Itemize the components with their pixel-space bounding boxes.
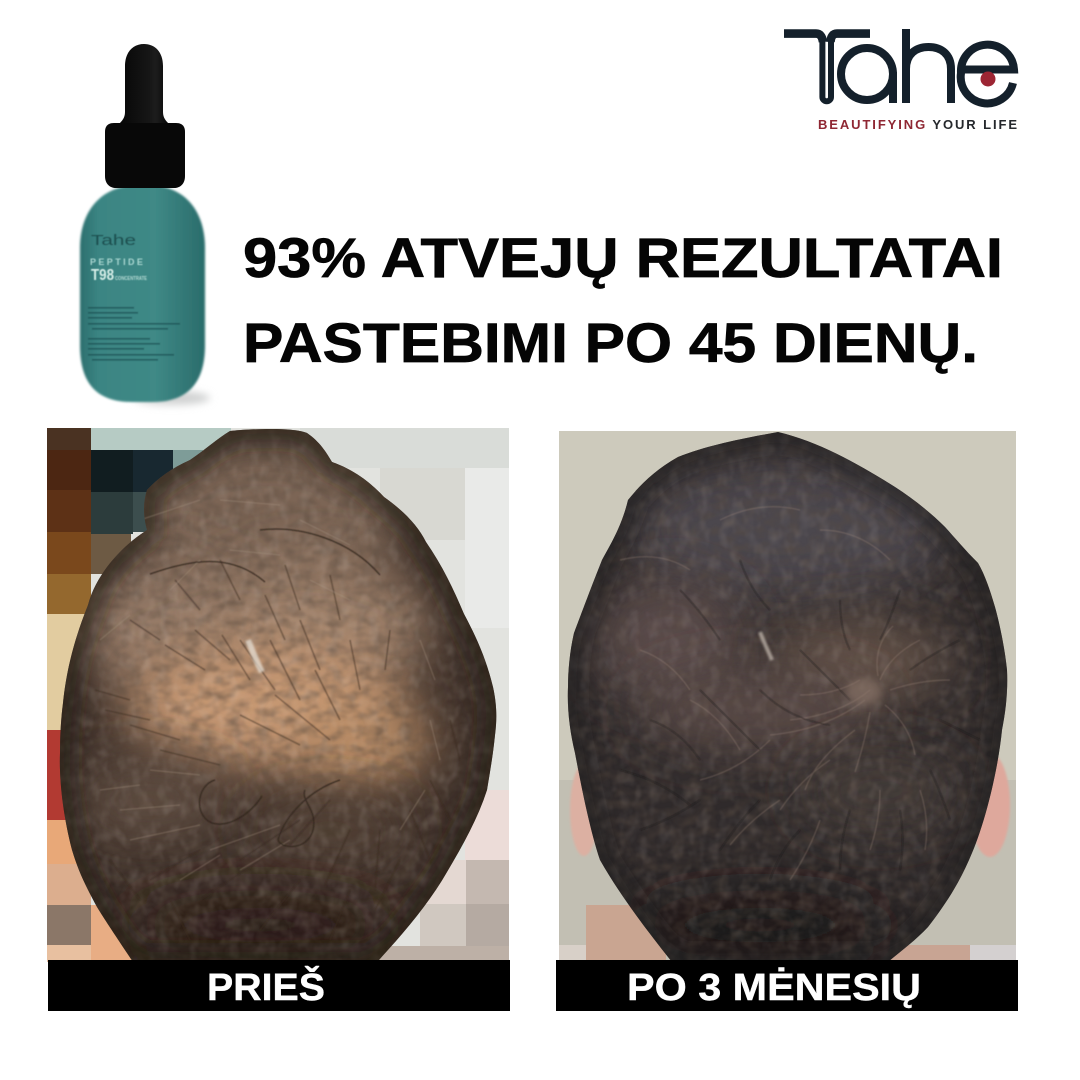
before label bar: PRIEŠ — [207, 964, 325, 1009]
ear right — [976, 757, 1010, 858]
product: serum dropper bottle — [80, 44, 210, 405]
title — [243, 226, 1003, 374]
bottle label text: Tahe — [91, 232, 136, 249]
before hair strands — [95, 500, 460, 940]
ear left — [570, 768, 594, 856]
logo: Tahe — [784, 29, 1017, 132]
title line 2: PASTEBIMI PO 45 DIENŲ. — [243, 311, 978, 374]
bottle label text: CONCENTRATE — [115, 276, 147, 282]
title line 1: 93% ATVEJŲ REZULTATAI — [243, 226, 1003, 289]
panel: after photo — [556, 431, 1018, 1011]
after label bar — [556, 960, 1018, 1011]
logo tagline: BEAUTIFYING YOUR LIFE — [818, 117, 1017, 132]
panel: before photo — [47, 428, 510, 1011]
before head with thinning hair — [47, 428, 509, 962]
before label bar — [48, 960, 510, 1011]
bottle label text: T98 — [91, 267, 114, 284]
dropper collar — [105, 123, 185, 188]
after head with dense hair — [559, 431, 1016, 962]
logo wordmark — [784, 29, 1014, 103]
after photo background — [559, 431, 1016, 962]
bottle body — [80, 186, 205, 402]
bottle label text: PEPTIDE — [90, 257, 145, 267]
after hair strands — [620, 507, 980, 880]
bottle label text — [88, 232, 180, 361]
dropper bulb — [118, 44, 170, 125]
after label bar: PO 3 MĖNESIŲ — [627, 967, 921, 1009]
logo red dot — [980, 72, 996, 86]
before photo background mosaic — [47, 428, 509, 962]
